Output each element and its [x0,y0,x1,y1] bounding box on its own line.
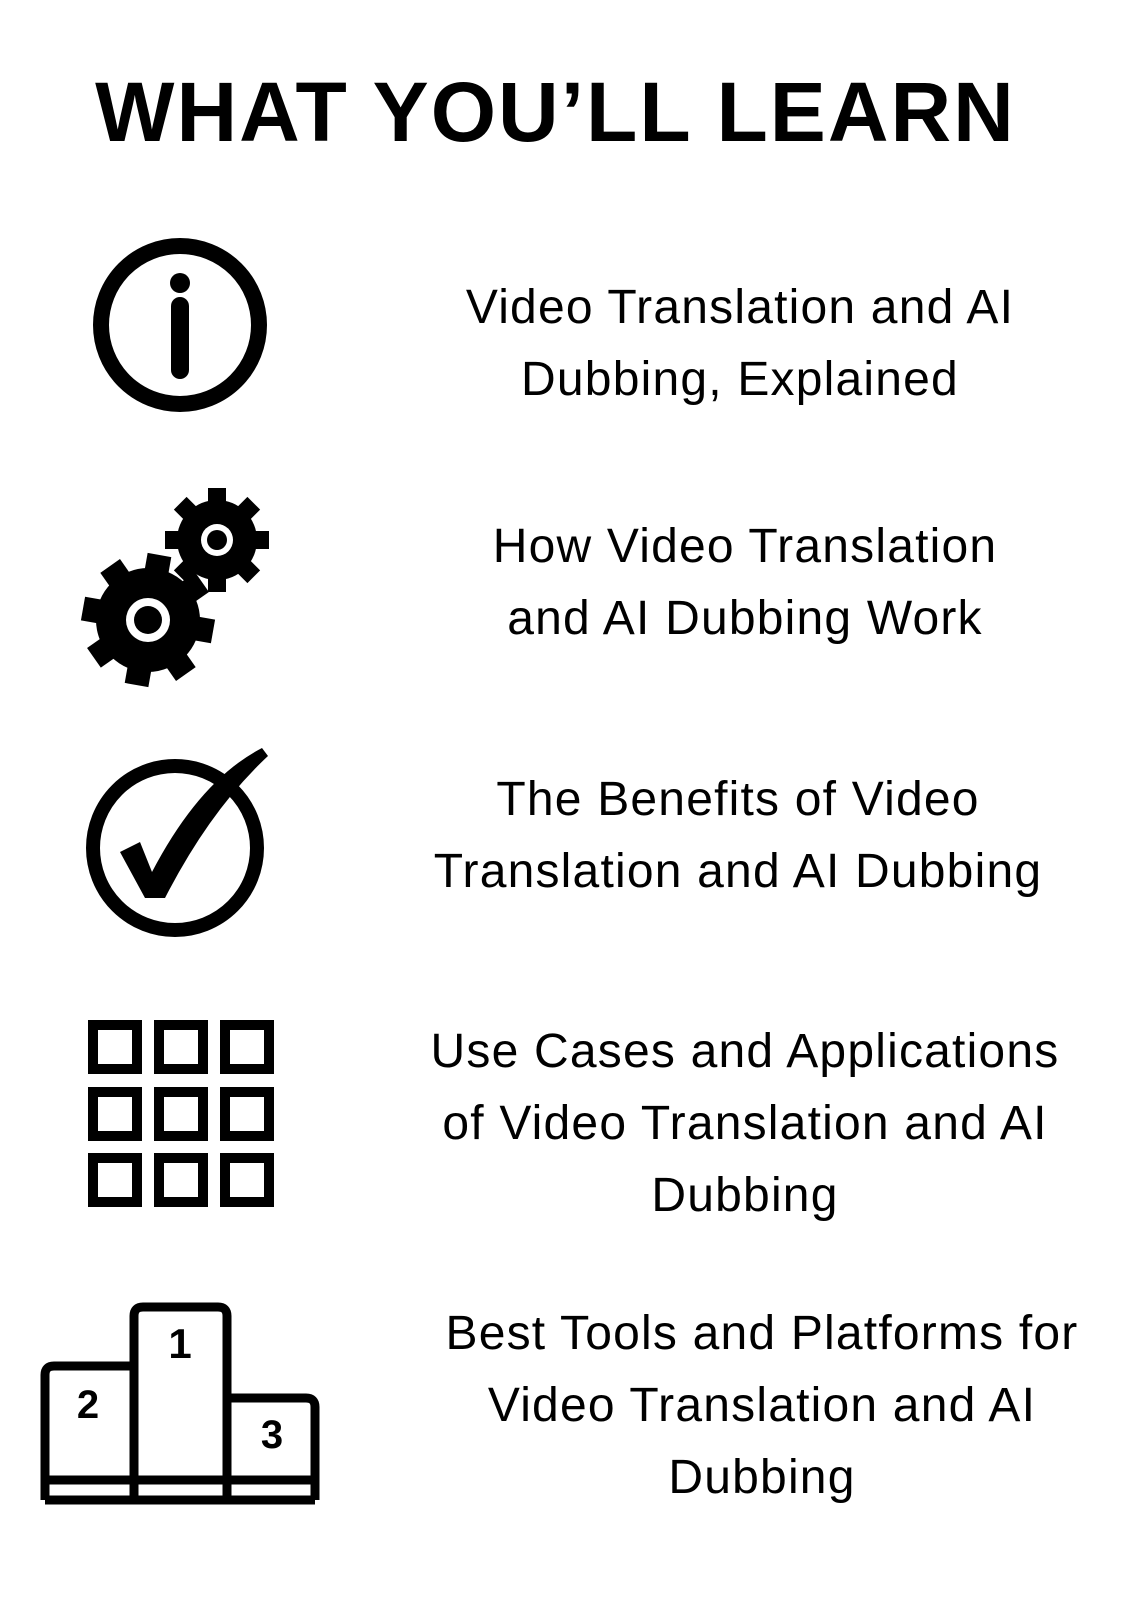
text: item 2: and AI Dubbing Work [507,592,983,645]
text: item 2 [493,520,997,645]
text: item 4: of Video Translation and AI [442,1097,1048,1150]
text: item 3: Translation and AI Dubbing [434,845,1042,898]
icon: podium [45,1307,315,1500]
text: item 5: Video Translation and AI [488,1379,1036,1432]
text: item 4 [431,1025,1059,1222]
title: WHAT YOU’LL LEARN [95,65,1016,159]
text: item 5: Dubbing [668,1451,856,1504]
icon: gears [81,488,269,687]
text: item 3 [434,773,1042,898]
text: item 5: Best Tools and Platforms for [446,1307,1078,1360]
icon: grid [93,1025,269,1202]
icon: podium: 1 [168,1320,192,1367]
icon: info [101,246,259,404]
text: item 5 [446,1307,1078,1504]
text: item 4: Dubbing [651,1169,839,1222]
text: item 1 [466,281,1014,406]
icon: podium: 3 [261,1413,283,1457]
icon: podium: 2 [77,1383,99,1427]
text: item 1: Dubbing, Explained [521,353,959,406]
text: item 4: Use Cases and Applications [431,1025,1059,1078]
text: item 3: The Benefits of Video [496,773,980,826]
text: item 1: Video Translation and AI [466,281,1014,334]
text: item 2: How Video Translation [493,520,997,573]
icon: checkmark [93,748,268,930]
